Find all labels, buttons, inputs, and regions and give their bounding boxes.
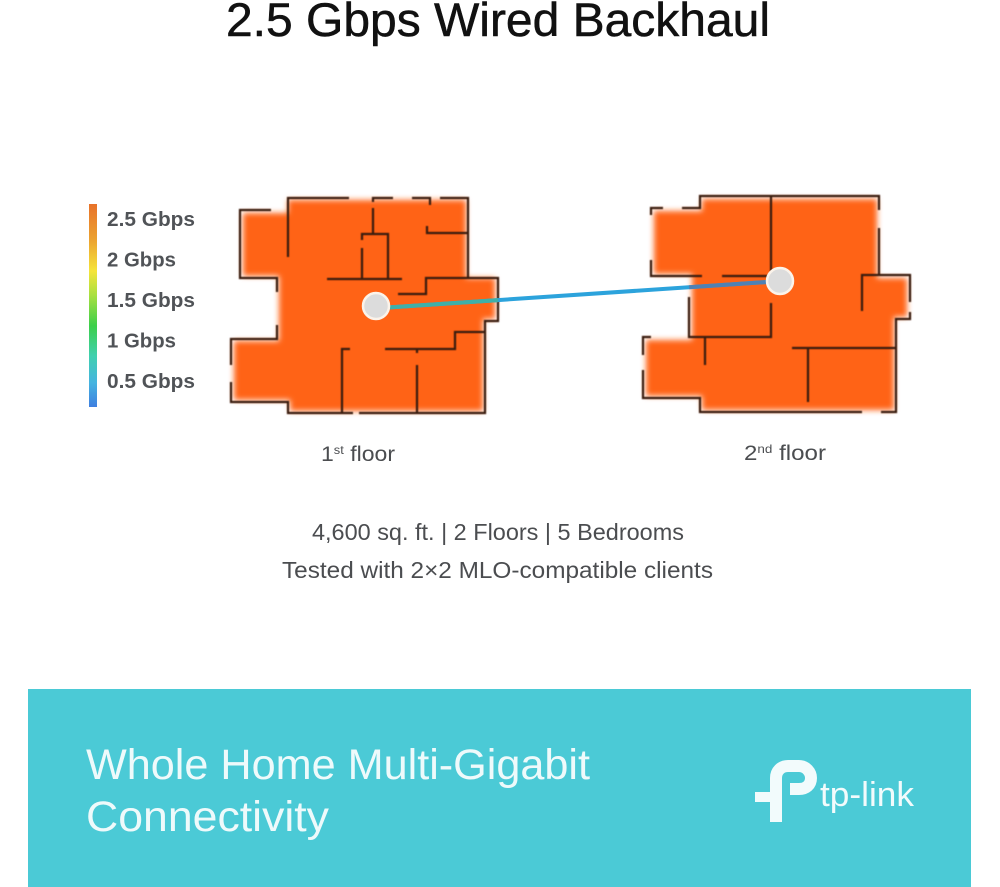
floor label: 1st floor: 1 — [321, 442, 333, 466]
legend labels — [107, 209, 195, 393]
coverage heat area, 2nd floor — [646, 199, 907, 410]
walls, 2nd floor — [643, 196, 910, 412]
floor label: 2nd floor: nd — [757, 442, 772, 456]
footer banner — [28, 689, 971, 887]
legend labels: 2 Gbps — [107, 250, 176, 272]
floor label: 2nd floor: 2 — [744, 441, 756, 465]
legend labels: 2.5 Gbps — [107, 209, 195, 231]
test conditions text: 4,600 sq. ft. | 2 Floors | 5 Bedrooms — [312, 519, 684, 545]
legend: speed scale — [89, 204, 195, 407]
legend labels: 1.5 Gbps — [107, 290, 195, 312]
router node, 2nd floor — [767, 268, 793, 294]
test conditions text — [282, 519, 713, 583]
coverage heat area, 1st floor — [234, 200, 495, 411]
logo wordmark: tp-link — [820, 776, 915, 814]
signal link between floors — [388, 282, 767, 308]
legend labels: 1 Gbps — [107, 330, 176, 352]
link line — [388, 282, 767, 308]
router node, 1st floor — [363, 293, 389, 319]
legend colour bar — [89, 204, 97, 407]
link segment over 1st floor — [388, 300, 498, 308]
floor plan: 1st floor — [231, 198, 498, 413]
banner heading: Connectivity — [86, 793, 330, 841]
banner heading — [86, 741, 590, 841]
walls, 1st floor — [231, 198, 498, 413]
logo: tp-link — [755, 766, 915, 822]
floor label: 1st floor: st — [334, 443, 345, 457]
floor plan: 2nd floor — [643, 196, 910, 412]
logo mark — [755, 766, 811, 822]
legend labels: 0.5 Gbps — [107, 371, 195, 393]
test conditions text: Tested with 2×2 MLO-compatible clients — [282, 557, 713, 583]
banner heading: Whole Home Multi-Gigabit — [86, 741, 590, 789]
link segment over 2nd floor — [689, 282, 767, 287]
floor label: 2nd floor: floor — [772, 441, 826, 465]
floor label: 1st floor: floor — [344, 442, 395, 466]
